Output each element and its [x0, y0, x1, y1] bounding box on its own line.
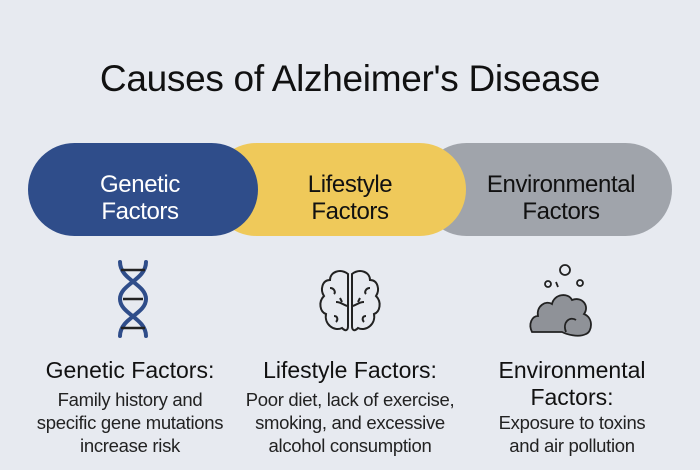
label: lifestyle: Lifestyle [308, 171, 392, 198]
icon: brain [319, 270, 381, 332]
pill: environmental [420, 143, 672, 236]
description: environmental: and air pollution [509, 435, 635, 456]
title: Causes of Alzheimer's Disease [100, 58, 600, 99]
heading: environmental: Factors: [530, 384, 614, 410]
column: environmental [498, 357, 646, 456]
label: environmental: Factors [522, 198, 600, 225]
label: lifestyle: Factors [311, 198, 389, 225]
heading: genetic: Genetic Factors: [46, 357, 214, 383]
label: genetic: Factors [101, 198, 179, 225]
column: genetic [37, 357, 223, 456]
description: environmental: Exposure to toxins [499, 412, 645, 433]
description: lifestyle: smoking, and excessive [255, 412, 445, 433]
icon: pollution cloud [529, 264, 592, 337]
heading: environmental [498, 357, 646, 410]
column: lifestyle [246, 357, 454, 456]
heading: lifestyle: Lifestyle Factors: [263, 357, 437, 383]
description: genetic [37, 389, 223, 456]
label: environmental [487, 171, 635, 225]
icon: DNA [118, 260, 148, 338]
description: lifestyle: alcohol consumption [269, 435, 431, 456]
label: genetic: Genetic [100, 171, 180, 198]
label: genetic [100, 171, 180, 225]
heading: environmental: Environmental [498, 357, 646, 383]
description: environmental [499, 412, 645, 456]
pill: genetic [28, 143, 258, 236]
label: lifestyle [308, 171, 392, 225]
label: environmental: Environmental [487, 171, 635, 198]
pill: lifestyle [210, 143, 466, 236]
description: lifestyle [246, 389, 454, 456]
description: genetic: specific gene mutations [37, 412, 223, 433]
description: genetic: Family history and [58, 389, 202, 410]
description: lifestyle: Poor diet, lack of exercise, [246, 389, 454, 410]
category bar [28, 143, 672, 236]
description: genetic: increase risk [80, 435, 180, 456]
